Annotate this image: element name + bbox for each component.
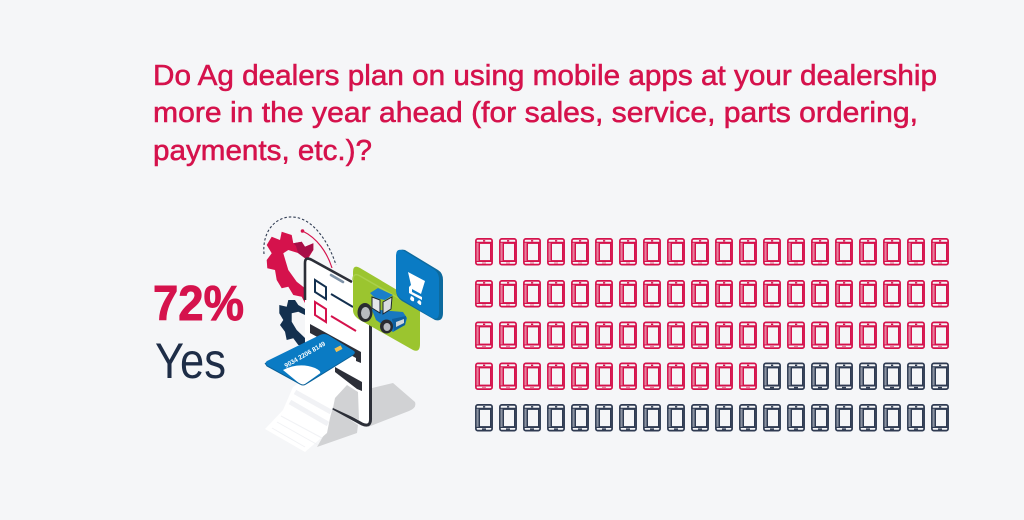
title: payments, etc.)?	[153, 135, 372, 167]
stat: 72% yes: Yes	[155, 333, 226, 389]
blue cart tile	[396, 250, 443, 320]
dashed arc	[264, 217, 336, 265]
stat: 72% yes	[153, 277, 244, 389]
title: Do Ag dealers plan on using mobile apps at your dealership	[153, 60, 937, 92]
navy gear	[279, 300, 305, 346]
stat: 72% yes: 72%	[153, 277, 244, 331]
row 4	[476, 363, 948, 389]
pictogram: 72 of 100 phones highlighted	[476, 239, 948, 431]
title	[153, 60, 937, 167]
phone body	[305, 259, 371, 425]
row 3	[476, 322, 948, 348]
row 2	[476, 281, 948, 307]
shadow	[317, 383, 415, 447]
title: more in the year ahead (for sales, service, parts ordering,	[153, 97, 918, 129]
checklist	[315, 280, 356, 331]
tractor icon	[358, 288, 407, 334]
receipt	[265, 368, 359, 452]
green tile	[353, 267, 420, 351]
row 1	[476, 239, 948, 265]
illustration: mobile payment phone	[264, 217, 443, 452]
icon: shopping cart	[408, 272, 425, 305]
row 5	[476, 405, 948, 431]
red gear	[267, 232, 313, 305]
credit card	[265, 334, 355, 385]
card number: 9034 2206 8149	[284, 340, 327, 370]
red arc	[301, 229, 332, 268]
card slots	[310, 324, 362, 391]
